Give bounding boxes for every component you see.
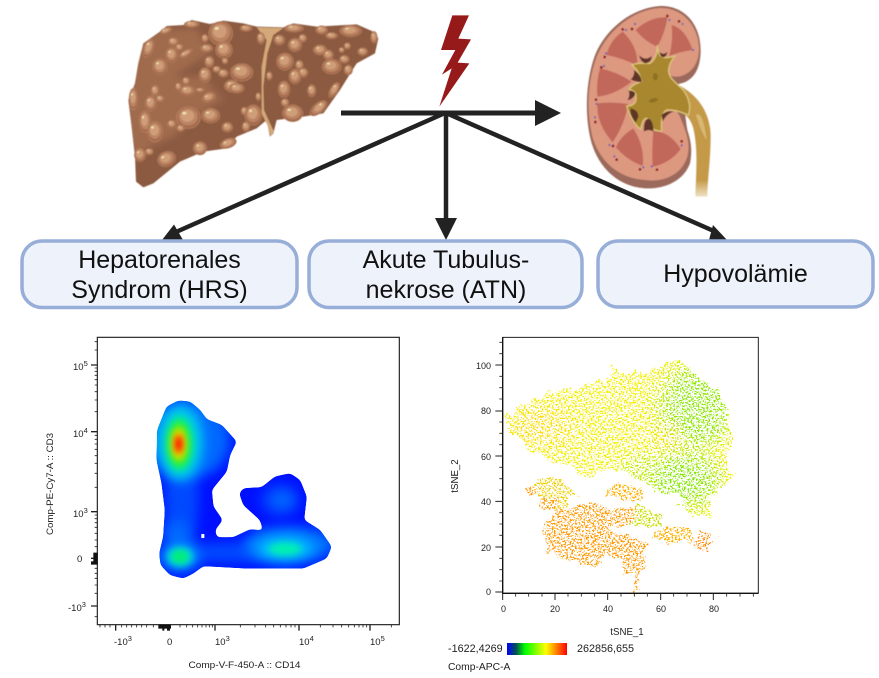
y axis labels: 40	[481, 497, 491, 507]
y axis labels: 0	[486, 587, 491, 597]
x axis labels: -10	[114, 637, 128, 648]
x axis labels: 20	[550, 604, 560, 614]
y axis labels: 10	[73, 362, 84, 373]
y axis labels: 3	[82, 600, 86, 609]
box: acute tubular necrosis: nekrose (ATN)	[366, 276, 526, 304]
y axis labels: 20	[481, 543, 491, 553]
y axis labels: 10	[73, 509, 84, 520]
x axis labels: 0	[501, 604, 506, 614]
box: acute tubular necrosis: Akute Tubulus-	[363, 246, 529, 274]
lower cluster	[543, 503, 647, 593]
x axis labels: 3	[226, 634, 230, 643]
mid clusters	[527, 475, 580, 512]
renal pelvis	[627, 46, 690, 131]
box: hypovolemia	[598, 241, 873, 307]
x axis ticks	[503, 593, 713, 600]
box: hypovolemia: Hypovolämie	[663, 260, 808, 288]
box: hepatorenal syndrome: Hepatorenales	[78, 246, 241, 274]
x axis labels: 40	[603, 604, 613, 614]
kidney cortex	[589, 8, 699, 181]
y axis labels	[476, 361, 491, 597]
plot frame	[503, 337, 758, 593]
colour scale labels: -1622,4269	[448, 643, 503, 655]
y axis title: Comp-PE-Cy7-A :: CD3	[45, 433, 56, 535]
x axis ticks	[116, 625, 370, 631]
arrow: liver to kidney	[341, 100, 561, 126]
density populations	[156, 400, 331, 578]
arrow: to acute tubular necrosis	[435, 113, 457, 240]
chart: flow cytometry density plot	[45, 337, 399, 671]
vessel dots	[594, 15, 683, 171]
y axis labels: 5	[84, 359, 88, 368]
x axis labels: 60	[656, 604, 666, 614]
x axis labels: 3	[128, 634, 132, 643]
arrow: to hepatorenal syndrome	[162, 113, 445, 240]
colour scale labels: 262856,655	[577, 643, 634, 655]
kidney capsule	[587, 6, 701, 188]
icon: lightning bolt	[439, 15, 471, 107]
y axis labels: 80	[481, 406, 491, 416]
x axis title: tSNE_1	[610, 627, 644, 638]
x axis title: Comp-V-F-450-A :: CD14	[188, 660, 300, 671]
colour scale labels	[448, 643, 634, 673]
y axis labels: -10	[68, 603, 82, 614]
colour scale bar	[507, 643, 567, 655]
renal pyramids	[597, 17, 693, 167]
scatter points	[500, 357, 740, 593]
icon: kidney	[587, 6, 711, 197]
chart: tSNE scatter plot	[448, 337, 758, 673]
x axis labels	[114, 634, 385, 648]
y axis labels	[68, 359, 88, 614]
x axis labels: 10	[370, 637, 381, 648]
ureter	[677, 85, 711, 197]
plot frame	[97, 337, 399, 625]
x axis labels: 5	[381, 634, 385, 643]
y axis labels: 4	[84, 426, 88, 435]
y axis labels: 0	[77, 554, 82, 565]
y axis ticks	[91, 365, 97, 606]
x axis labels: 80	[709, 604, 719, 614]
box: hepatorenal syndrome: Syndrom (HRS)	[71, 276, 248, 304]
calyx cups	[627, 52, 674, 132]
x axis labels: 4	[310, 634, 314, 643]
y axis labels: 100	[476, 361, 491, 371]
x axis labels: 0	[167, 637, 172, 648]
x axis labels: 10	[215, 637, 226, 648]
y axis ticks	[495, 365, 503, 592]
arrow: to hypovolemia	[446, 113, 727, 240]
y axis labels: 3	[84, 506, 88, 515]
x axis labels: 10	[299, 637, 310, 648]
main cluster	[500, 357, 740, 520]
box: hepatorenal syndrome	[22, 241, 297, 308]
y axis title: tSNE_2	[450, 459, 461, 493]
y axis labels: 10	[73, 429, 84, 440]
box: acute tubular necrosis	[309, 241, 582, 308]
right small clusters	[653, 523, 691, 543]
y axis labels: 60	[481, 452, 491, 462]
icon: cirrhotic liver	[123, 20, 378, 187]
x axis labels	[501, 604, 719, 614]
colour scale labels: Comp-APC-A	[448, 662, 510, 673]
